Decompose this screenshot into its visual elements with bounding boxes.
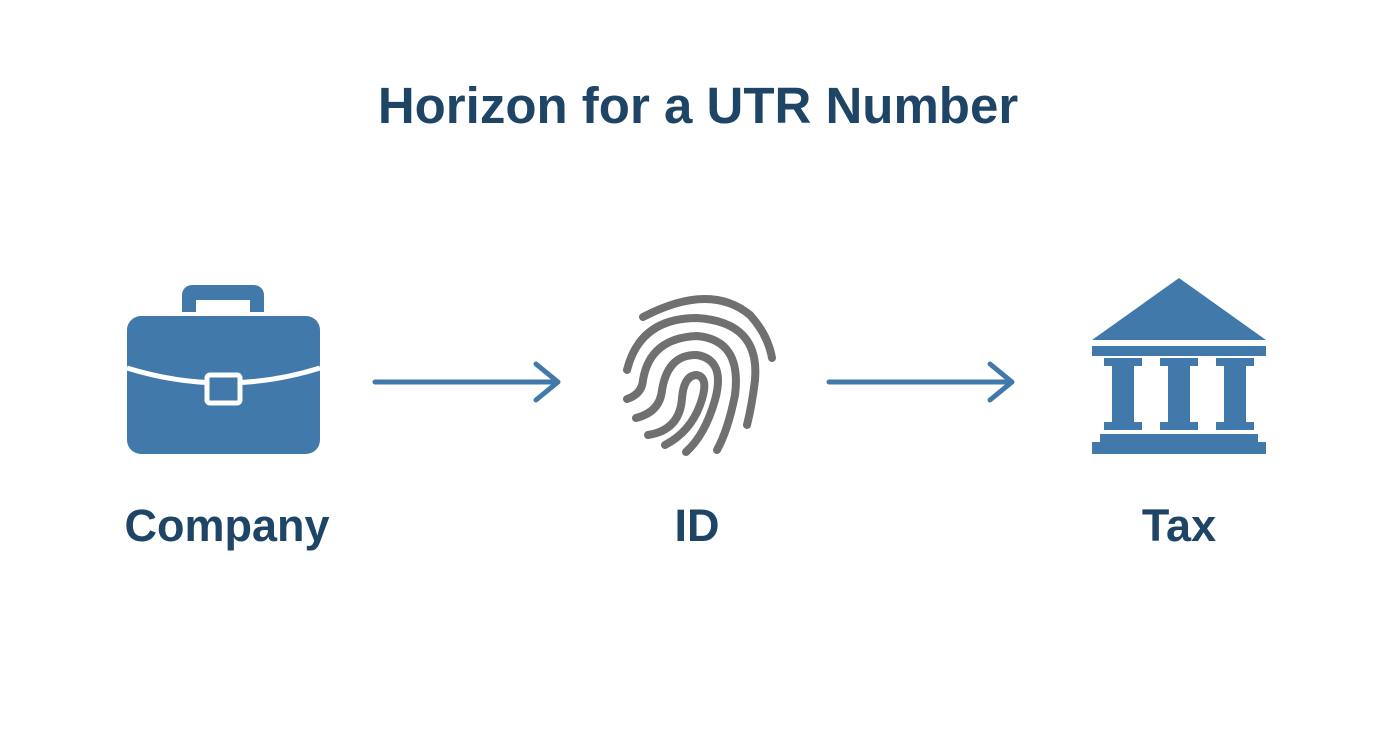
arrow 2 xyxy=(829,364,1012,400)
label: Tax: Tax xyxy=(1142,500,1216,551)
icon: fingerprint xyxy=(627,299,772,452)
arrow 1 xyxy=(375,364,558,400)
icon: bank building xyxy=(1092,278,1266,454)
title: Horizon for a UTR Number xyxy=(378,77,1018,134)
label: ID: ID xyxy=(674,500,720,551)
label: Company: Company xyxy=(124,500,330,551)
icon: briefcase xyxy=(127,285,320,454)
